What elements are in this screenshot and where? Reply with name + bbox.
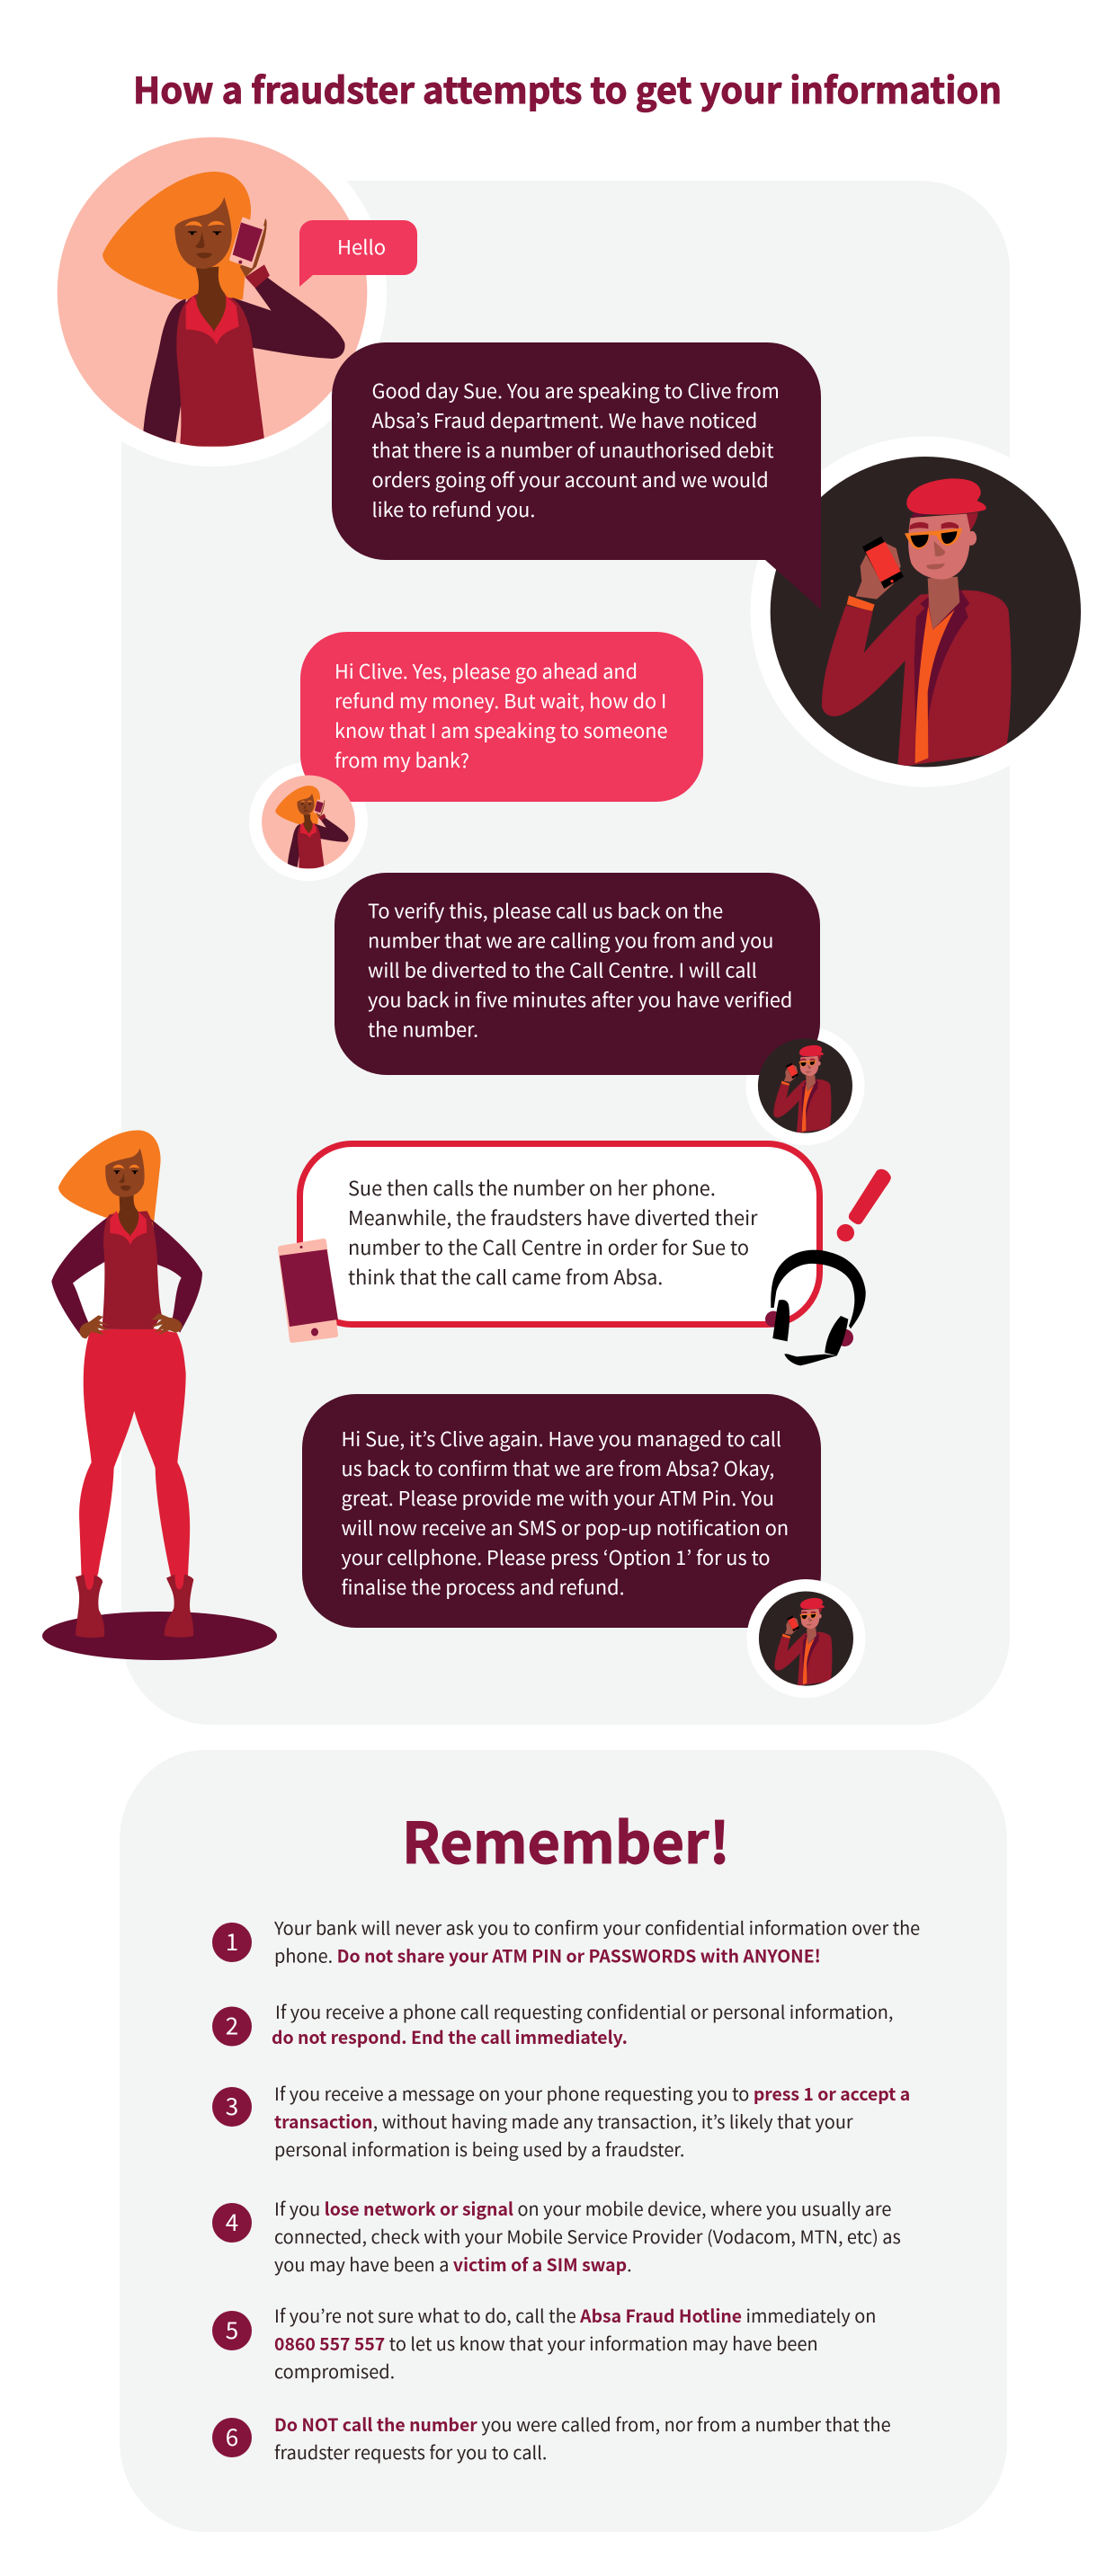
illustration: Clive small avatar 2: [759, 1592, 853, 1686]
callout: Sue calls the number: number to the Call Centre in order for Sue to: [348, 1233, 749, 1261]
speech bubble: Clive introduces himself: that there is a number of unauthorised debit: [372, 436, 774, 464]
tip 6: [212, 2411, 891, 2465]
callout: Sue calls the number: Meanwhile, the fraudsters have diverted their: [348, 1204, 758, 1231]
speech bubble: Sue asks for verification: know that I am speaking to someone: [334, 716, 667, 744]
speech bubble: Sue asks for verification: Hi Clive. Yes, please go ahead and: [334, 657, 638, 685]
speech bubble: Clive introduces himself: like to refund you.: [372, 495, 535, 523]
illustration: Sue small avatar: [262, 776, 355, 868]
icon: exclamation mark: [837, 1169, 891, 1241]
panel: Remember: [120, 1750, 1007, 2532]
tip 2: 2: [226, 2008, 238, 2042]
title: How a fraudster attempts to get your information: [133, 62, 1002, 114]
heading: Remember!: Remember!: [402, 1799, 730, 1880]
speech bubble: Clive asks for a call back: number that we are calling you from and you: [368, 926, 773, 955]
tip 5: compromised.: [274, 2358, 395, 2384]
illustration: Clive on phone: [771, 457, 1081, 767]
speech bubble: Clive asks for a call back: will be diverted to the Call Centre. I will call: [368, 956, 757, 983]
speech bubble: Clive asks for the PIN: us back to confirm that we are from Absa? Okay,: [342, 1454, 774, 1482]
avatar ring: Sue small: [249, 762, 368, 881]
tip 3: If you receive a message on your phone requesting you to press 1 or accept a: [274, 2080, 910, 2106]
avatar ring: Clive large: [750, 437, 1101, 787]
tip 4: 4: [226, 2205, 238, 2238]
tip 4: you may have been a victim of a SIM swap.: [274, 2251, 632, 2277]
tip 3: personal information is being used by a fraudster.: [274, 2136, 684, 2162]
speech bubble: Sue asks for verification: [300, 632, 703, 802]
tip 4: [212, 2195, 901, 2277]
callout: Sue calls the number: Sue then calls the number on her phone.: [348, 1174, 716, 1202]
tip 5: [212, 2302, 876, 2384]
speech bubble: Sue asks for verification: from my bank?: [334, 746, 469, 774]
tip 4: If you lose network or signal on your mobile device, where you usually are: [274, 2195, 891, 2221]
speech bubble: Clive asks for a call back: To verify this, please call us back on the: [368, 897, 723, 924]
tip 5: 0860 557 557 to let us know that your information may have been: [274, 2330, 818, 2356]
tip 3: 3: [226, 2089, 238, 2122]
tip 1: [212, 1914, 920, 1968]
tip 5: 5: [226, 2313, 238, 2346]
speech bubble: Clive asks for a call back: the number.: [368, 1016, 478, 1043]
speech bubble: Hello: Hello: [337, 232, 386, 261]
tip 1: Your bank will never ask you to confirm your confidential information over the: [273, 1914, 920, 1940]
speech bubble: Clive asks for the PIN: great. Please provide me with your ATM Pin. You: [342, 1484, 774, 1512]
illustration: Sue standing: [42, 1131, 277, 1660]
speech bubble: Clive introduces himself: orders going off your account and we would: [372, 466, 769, 493]
tip 6: 6: [226, 2420, 238, 2453]
tip 6: Do NOT call the number you were called from, nor from a number that the: [274, 2411, 891, 2437]
speech bubble: Clive asks for the PIN: [302, 1394, 821, 1628]
speech bubble: Clive asks for the PIN: will now receive an SMS or pop-up notification on: [342, 1514, 789, 1541]
panel: conversation background: [121, 181, 1010, 1725]
tip 4: connected, check with your Mobile Service Provider (Vodacom, MTN, etc) as: [274, 2223, 901, 2249]
speech bubble: Clive asks for the PIN: your cellphone. Please press ‘Option 1’ for us to: [342, 1543, 770, 1571]
avatar ring: Clive small 2: [746, 1579, 865, 1698]
tip 2: If you receive a phone call requesting confidential or personal information,: [275, 1998, 893, 2024]
speech bubble: Clive introduces himself: Good day Sue. You are speaking to Clive from: [372, 377, 780, 404]
tip 3: [212, 2080, 910, 2162]
illustration: Clive small avatar 1: [758, 1039, 852, 1133]
speech bubble: Clive asks for the PIN: Hi Sue, it’s Clive again. Have you managed to call: [342, 1425, 781, 1452]
speech bubble: Clive introduces himself: [332, 342, 821, 609]
speech bubble: Sue asks for verification: refund my money. But wait, how do I: [334, 687, 666, 715]
speech bubble: Clive introduces himself: Absa’s Fraud department. We have noticed: [372, 406, 757, 434]
tip 2: [212, 1998, 893, 2049]
tip 2: do not respond. End the call immediately.: [272, 2023, 628, 2049]
callout: Sue calls the number: [300, 1143, 820, 1325]
tip 3: transaction, without having made any transaction, it’s likely that your: [274, 2108, 853, 2134]
tip 6: fraudster requests for you to call.: [274, 2438, 547, 2465]
speech bubble: Clive asks for a call back: you back in five minutes after you have verified: [368, 985, 792, 1014]
speech bubble: Clive asks for the PIN: finalise the process and refund.: [342, 1573, 625, 1601]
speech bubble: Hello: [299, 220, 417, 287]
icon: headset: [765, 1250, 866, 1365]
tip 1: 1: [226, 1924, 238, 1958]
tip 1: phone. Do not share your ATM PIN or PASSWORDS with ANYONE!: [274, 1941, 821, 1968]
speech bubble: Clive asks for a call back: [334, 873, 820, 1075]
avatar ring: Clive small 1: [746, 1026, 865, 1145]
icon: phone: [280, 1241, 338, 1340]
callout: Sue calls the number: think that the call came from Absa.: [348, 1263, 663, 1291]
illustration: Sue on phone: [58, 138, 367, 447]
tip 5: If you’re not sure what to do, call the Absa Fraud Hotline immediately on: [274, 2302, 876, 2328]
avatar ring: Sue large: [38, 118, 387, 466]
